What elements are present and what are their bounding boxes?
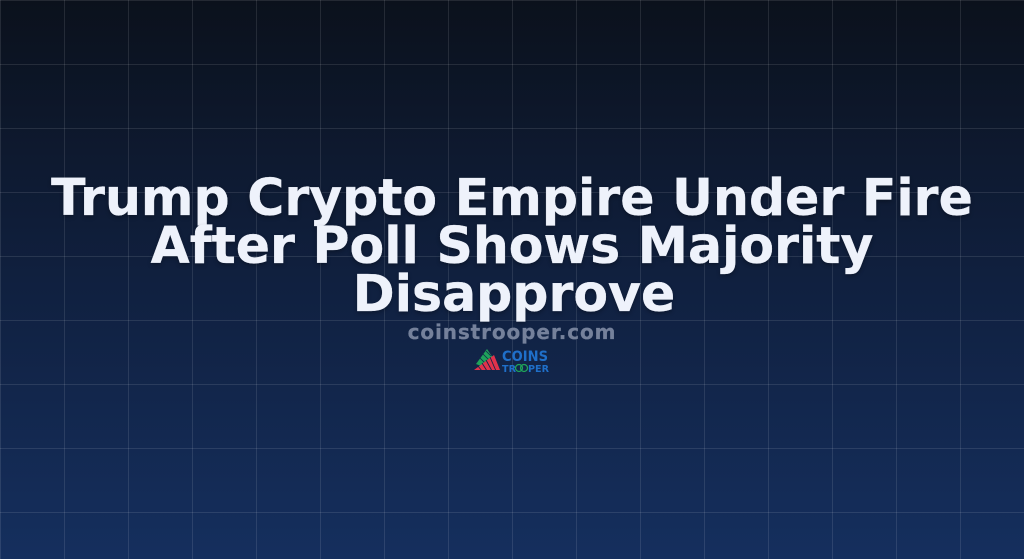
- icon: coinstrooper logo: COINS: [502, 349, 548, 365]
- icon: coinstrooper logo: [474, 349, 549, 375]
- site name: coinstrooper.com: [408, 320, 616, 344]
- title: After Poll Shows Majority: [151, 216, 873, 275]
- title: Trump Crypto Empire Under Fire: [51, 168, 973, 227]
- title: Disapprove: [353, 264, 675, 323]
- icon: coinstrooper logo: TR: [502, 364, 516, 375]
- title: [51, 168, 973, 324]
- icon: coinstrooper logo: PER: [528, 364, 549, 375]
